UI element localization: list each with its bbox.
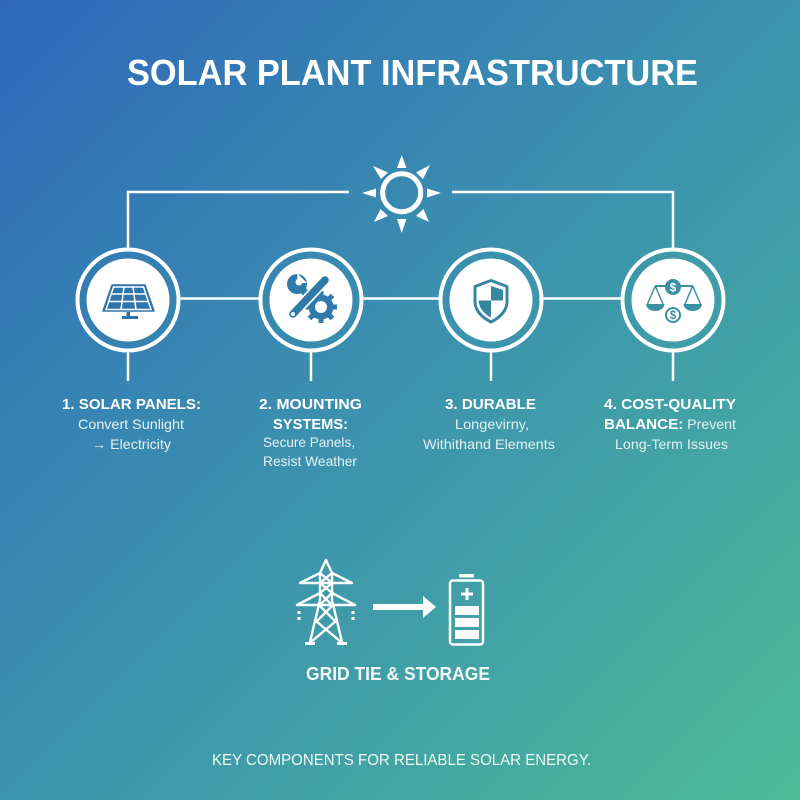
label: cost-quality balance: Long-Term Issues — [615, 436, 728, 452]
icon: scales and coins badge: $ — [670, 280, 677, 294]
step 3: durable — [423, 250, 555, 452]
label: solar panels: → Electricity — [92, 436, 171, 452]
label: durable: 3. DURABLE — [445, 396, 536, 413]
arrow: grid to storage — [373, 596, 436, 618]
label: solar panels: Convert Sunlight — [78, 416, 184, 432]
connector bracket from sun to outer steps — [128, 192, 673, 381]
icon: scales and coins badge — [622, 250, 724, 350]
icon: sun — [362, 155, 441, 233]
icon: scales and coins badge: $ — [670, 310, 677, 322]
label: solar panels: 1. SOLAR PANELS: — [62, 396, 201, 413]
label: mounting systems — [259, 396, 362, 469]
label: cost-quality balance: 4. COST-QUALITY — [604, 396, 736, 413]
label: mounting systems: 2. MOUNTING — [259, 396, 362, 413]
label: mounting systems: Secure Panels, — [263, 434, 355, 450]
step 1: solar panels — [62, 250, 201, 452]
step 4: cost-quality balance — [604, 250, 736, 452]
step 2: mounting systems — [259, 250, 362, 469]
label: durable: Longevirny, — [455, 416, 529, 432]
label: durable: Withithand Elements — [423, 436, 555, 452]
icon: wrench and gear badge — [260, 250, 362, 350]
gear — [305, 291, 337, 323]
label: cost-quality balance: BALANCE: Prevent — [604, 416, 736, 433]
icon: solar panel badge — [78, 250, 178, 350]
label: mounting systems: Resist Weather — [263, 453, 357, 469]
icon: shield badge — [440, 250, 542, 350]
icon: transmission tower — [297, 560, 355, 644]
wrench head — [287, 273, 313, 301]
label: mounting systems: SYSTEMS: — [273, 416, 348, 433]
heading: grid tie and storage: GRID TIE & STORAGE — [306, 664, 490, 684]
icon: battery — [450, 574, 483, 644]
title: SOLAR PLANT INFRASTRUCTURE — [127, 52, 698, 93]
label: durable — [423, 396, 555, 452]
label: solar panels — [62, 396, 201, 452]
footer tagline: KEY COMPONENTS FOR RELIABLE SOLAR ENERGY. — [212, 752, 591, 769]
label: cost-quality balance — [604, 396, 736, 452]
